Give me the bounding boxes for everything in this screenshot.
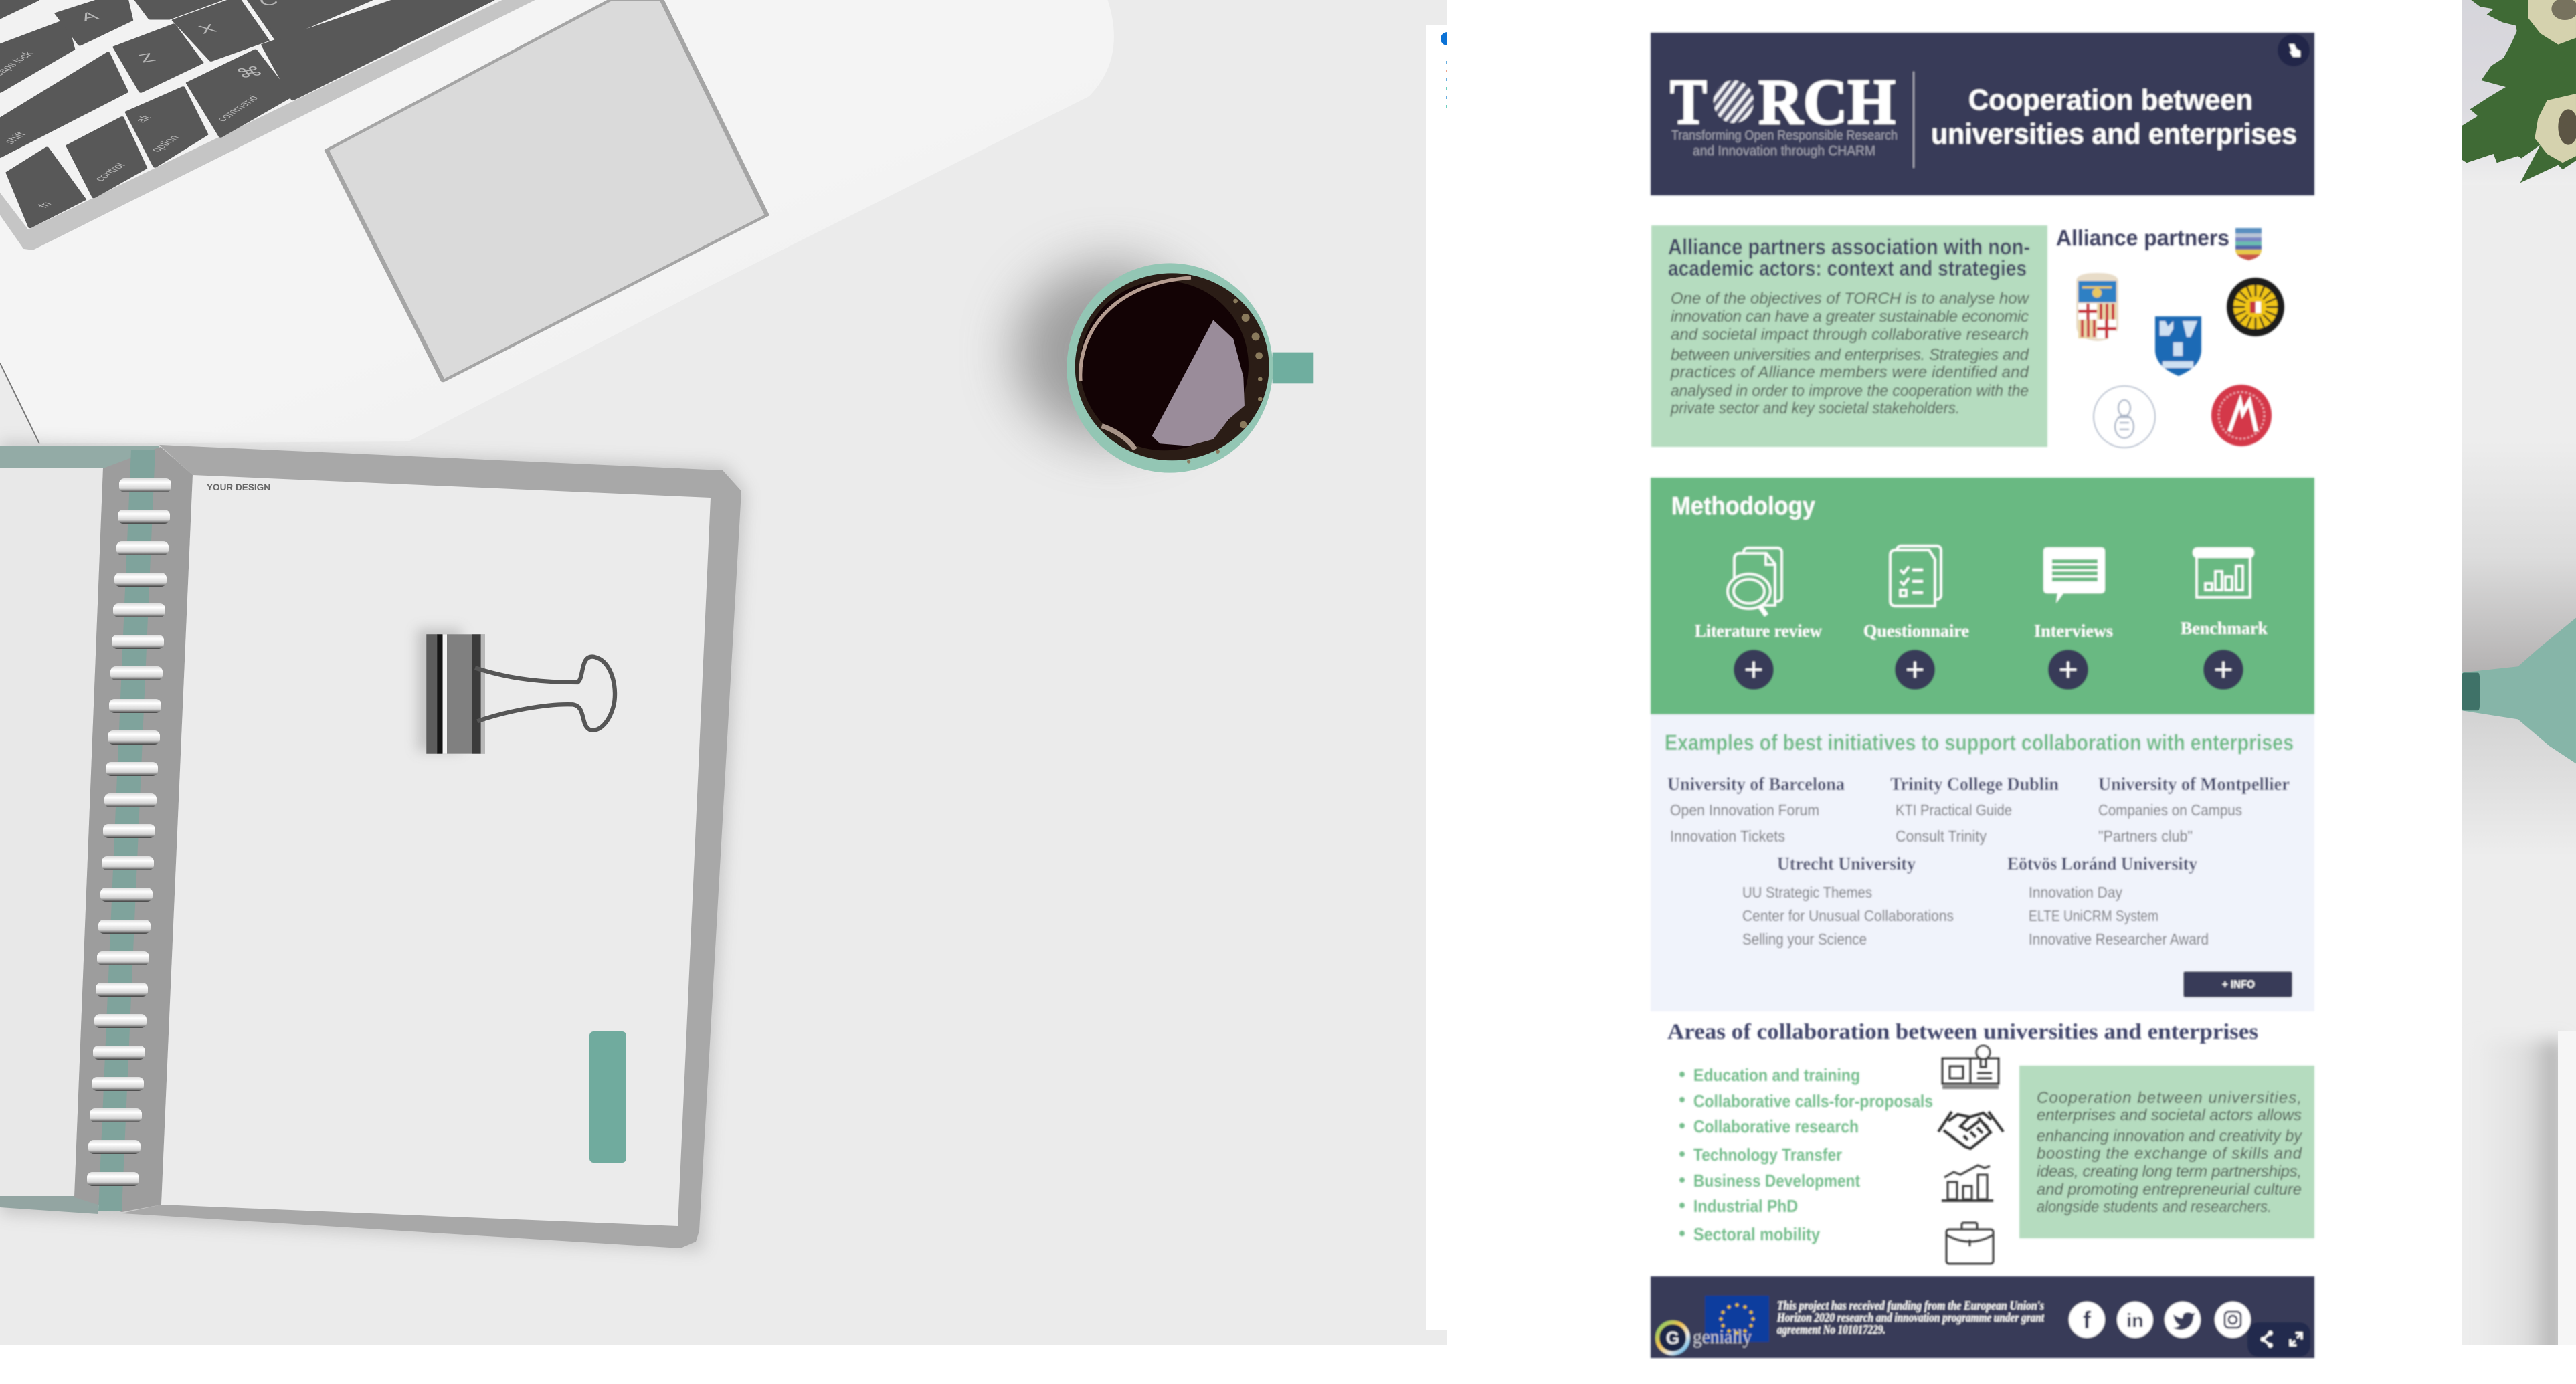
background photo: desk left [0, 0, 1447, 1345]
areas list: Business Development [1693, 1171, 1860, 1191]
genially badge [1657, 1322, 1752, 1353]
TORCH logo: RCH [1758, 66, 1896, 138]
initiatives lists: ELTE UniCRM System [2029, 907, 2158, 924]
callout: cooperation text: enhancing innovation and creativity by [2037, 1127, 2303, 1145]
icon: handshake [1938, 1112, 2003, 1149]
keyboard: command [213, 94, 262, 123]
context body: practices of Alliance members were identified and [1670, 363, 2029, 381]
logo: University of Barcelona [2076, 273, 2118, 341]
initiatives lists: Companies on Campus [2098, 801, 2242, 819]
initiatives lists: Open Innovation Forum [1670, 801, 1819, 819]
notebook label: YOUR DESIGN [207, 482, 270, 492]
initiatives lists: Innovative Researcher Award [2029, 930, 2209, 948]
method labels [1695, 619, 2268, 641]
method labels: Interviews [2034, 621, 2113, 641]
keyboard: control [92, 162, 128, 183]
funding text: This project has received funding from the European Union's [1777, 1299, 2044, 1313]
context body: and societal impact through collaborative research [1671, 326, 2029, 344]
info button: + INFO [2222, 978, 2255, 991]
blue dot and dots at panel edge [1441, 32, 1447, 108]
icon: open book with bulb [1942, 1046, 1999, 1087]
context heading [1668, 235, 2030, 280]
icon: EU flag [1705, 1296, 1769, 1342]
method labels: Questionnaire [1863, 621, 1969, 641]
social icons: f [2083, 1306, 2092, 1334]
icon: alliance shield [2235, 228, 2262, 260]
social icons [2069, 1302, 2251, 1338]
icon: briefcase [1946, 1223, 1993, 1264]
panel: best initiatives [1651, 714, 2314, 1011]
context heading: Alliance partners association with non- [1668, 235, 2030, 259]
initiatives lists: Center for Unusual Collaborations [1742, 907, 1954, 924]
callout: cooperation text: and promoting entrepreneurial culture [2037, 1181, 2302, 1199]
logo: Utrecht University [2227, 278, 2284, 336]
method labels: Literature review [1695, 621, 1822, 641]
touch icon [2278, 34, 2310, 66]
university names: Utrecht University [1777, 854, 1916, 874]
genially badge: G [1666, 1328, 1679, 1348]
background photo: desk right [2462, 0, 2576, 1384]
panel: methodology [1651, 478, 2314, 714]
TORCH logo: and Innovation through CHARM [1693, 144, 1875, 159]
TORCH logo: T [1670, 66, 1707, 138]
initiatives lists: Innovation Day [2029, 884, 2122, 901]
methodology heading: Methodology [1671, 492, 1815, 520]
context body: One of the objectives of TORCH is to analyse how [1671, 290, 2030, 308]
logo: Trinity College Dublin [2155, 316, 2201, 376]
icon: interviews [2043, 547, 2105, 603]
panel: context [1651, 225, 2047, 447]
teal vase [2462, 618, 2576, 763]
areas list: Education and training [1693, 1065, 1860, 1085]
TORCH logo: Transforming Open Responsible Research [1671, 128, 1898, 143]
university names [1667, 774, 2290, 874]
infographic panel [1651, 33, 2314, 1358]
initiatives lists: UU Strategic Themes [1742, 884, 1872, 901]
share controls [2247, 1322, 2310, 1357]
areas list: Collaborative calls-for-proposals [1693, 1091, 1933, 1111]
genially badge: genially [1693, 1326, 1752, 1348]
coffee cup [1015, 263, 1313, 473]
initiatives lists: Innovation Tickets [1670, 827, 1785, 845]
keyboard: alt [133, 114, 154, 124]
areas list: Sectoral mobility [1693, 1224, 1820, 1244]
callout: cooperation text [2019, 1066, 2314, 1238]
context body [1670, 290, 2030, 417]
areas list: Technology Transfer [1693, 1145, 1842, 1165]
funding text: agreement No 101017229. [1777, 1323, 1885, 1337]
title [1931, 84, 2297, 151]
method labels: Benchmark [2181, 619, 2268, 638]
callout: cooperation text: boosting the exchange of skills and [2037, 1145, 2302, 1163]
trackpad [327, 0, 767, 381]
plus buttons [1734, 650, 2243, 690]
icon: chart [1942, 1165, 1993, 1201]
callout: cooperation text: Cooperation between universities, [2037, 1089, 2302, 1107]
areas list: Industrial PhD [1693, 1196, 1798, 1216]
areas heading: Areas of collaboration between universities and enterprises [1667, 1020, 2258, 1044]
initiatives lists: Consult Trinity [1896, 827, 1987, 845]
keyboard [0, 0, 535, 250]
TORCH logo [1669, 79, 1898, 159]
university names: Trinity College Dublin [1890, 774, 2059, 794]
keyboard: ⌘ [232, 64, 267, 81]
areas list [1679, 1065, 1933, 1244]
context body: private sector and key societal stakeholders. [1670, 399, 1960, 417]
context body: analysed in order to improve the cooperation with the [1671, 382, 2029, 400]
keyboard: fn [35, 201, 55, 209]
context heading: academic actors: context and strategies [1668, 256, 2027, 280]
keyboard: shift [1, 131, 29, 145]
initiatives lists: Selling your Science [1742, 930, 1867, 948]
icon: benchmark [2193, 547, 2254, 597]
notebook [0, 441, 746, 1251]
keyboard: Z [135, 51, 159, 66]
logo: Eötvös Loránd University [2094, 386, 2155, 448]
keyboard: A [77, 9, 102, 24]
icon: questionnaire [1890, 546, 1941, 606]
university names: University of Montpellier [2098, 774, 2290, 794]
info button [2183, 971, 2292, 997]
keyboard: X [195, 22, 220, 37]
spiral rings [87, 478, 171, 1186]
footer [1651, 1276, 2314, 1358]
keyboard: option [148, 134, 183, 153]
header banner [1651, 33, 2314, 195]
panel: areas of collaboration [1667, 1020, 2314, 1264]
callout: cooperation text: enterprises and societal actors allows [2037, 1106, 2302, 1124]
title: universities and enterprises [1931, 118, 2297, 151]
alliance heading: Alliance partners [2056, 225, 2229, 250]
initiatives lists: KTI Practical Guide [1896, 801, 2012, 819]
university names: Eötvös Loránd University [2007, 854, 2197, 874]
logo: University of Montpellier [2211, 385, 2272, 446]
panel: alliance partners [2056, 225, 2284, 448]
context body: innovation can have a greater sustainable economic [1671, 308, 2029, 326]
title: Cooperation between [1968, 84, 2253, 116]
initiatives lists: "Partners club" [2098, 827, 2193, 845]
icon: literature review [1728, 548, 1782, 615]
initiatives lists [1670, 801, 2242, 948]
context body: between universities and enterprises. Strategies and [1671, 346, 2029, 364]
areas list: Collaborative research [1693, 1116, 1859, 1136]
teal eraser [589, 1031, 626, 1163]
university names: University of Barcelona [1667, 774, 1845, 794]
social icons: in [2126, 1310, 2144, 1332]
plant [2462, 0, 2576, 185]
binder clip [417, 629, 615, 754]
initiatives heading: Examples of best initiatives to support collaboration with enterprises [1665, 730, 2294, 755]
paper sheet [2558, 1031, 2576, 1345]
funding text: Horizon 2020 research and innovation programme under grant [1776, 1311, 2045, 1325]
callout: cooperation text: alongside students and researchers. [2037, 1198, 2272, 1216]
callout: cooperation text: ideas, creating long term partnerships, [2037, 1163, 2302, 1181]
funding text [1776, 1299, 2045, 1337]
laptop [0, 0, 1114, 443]
